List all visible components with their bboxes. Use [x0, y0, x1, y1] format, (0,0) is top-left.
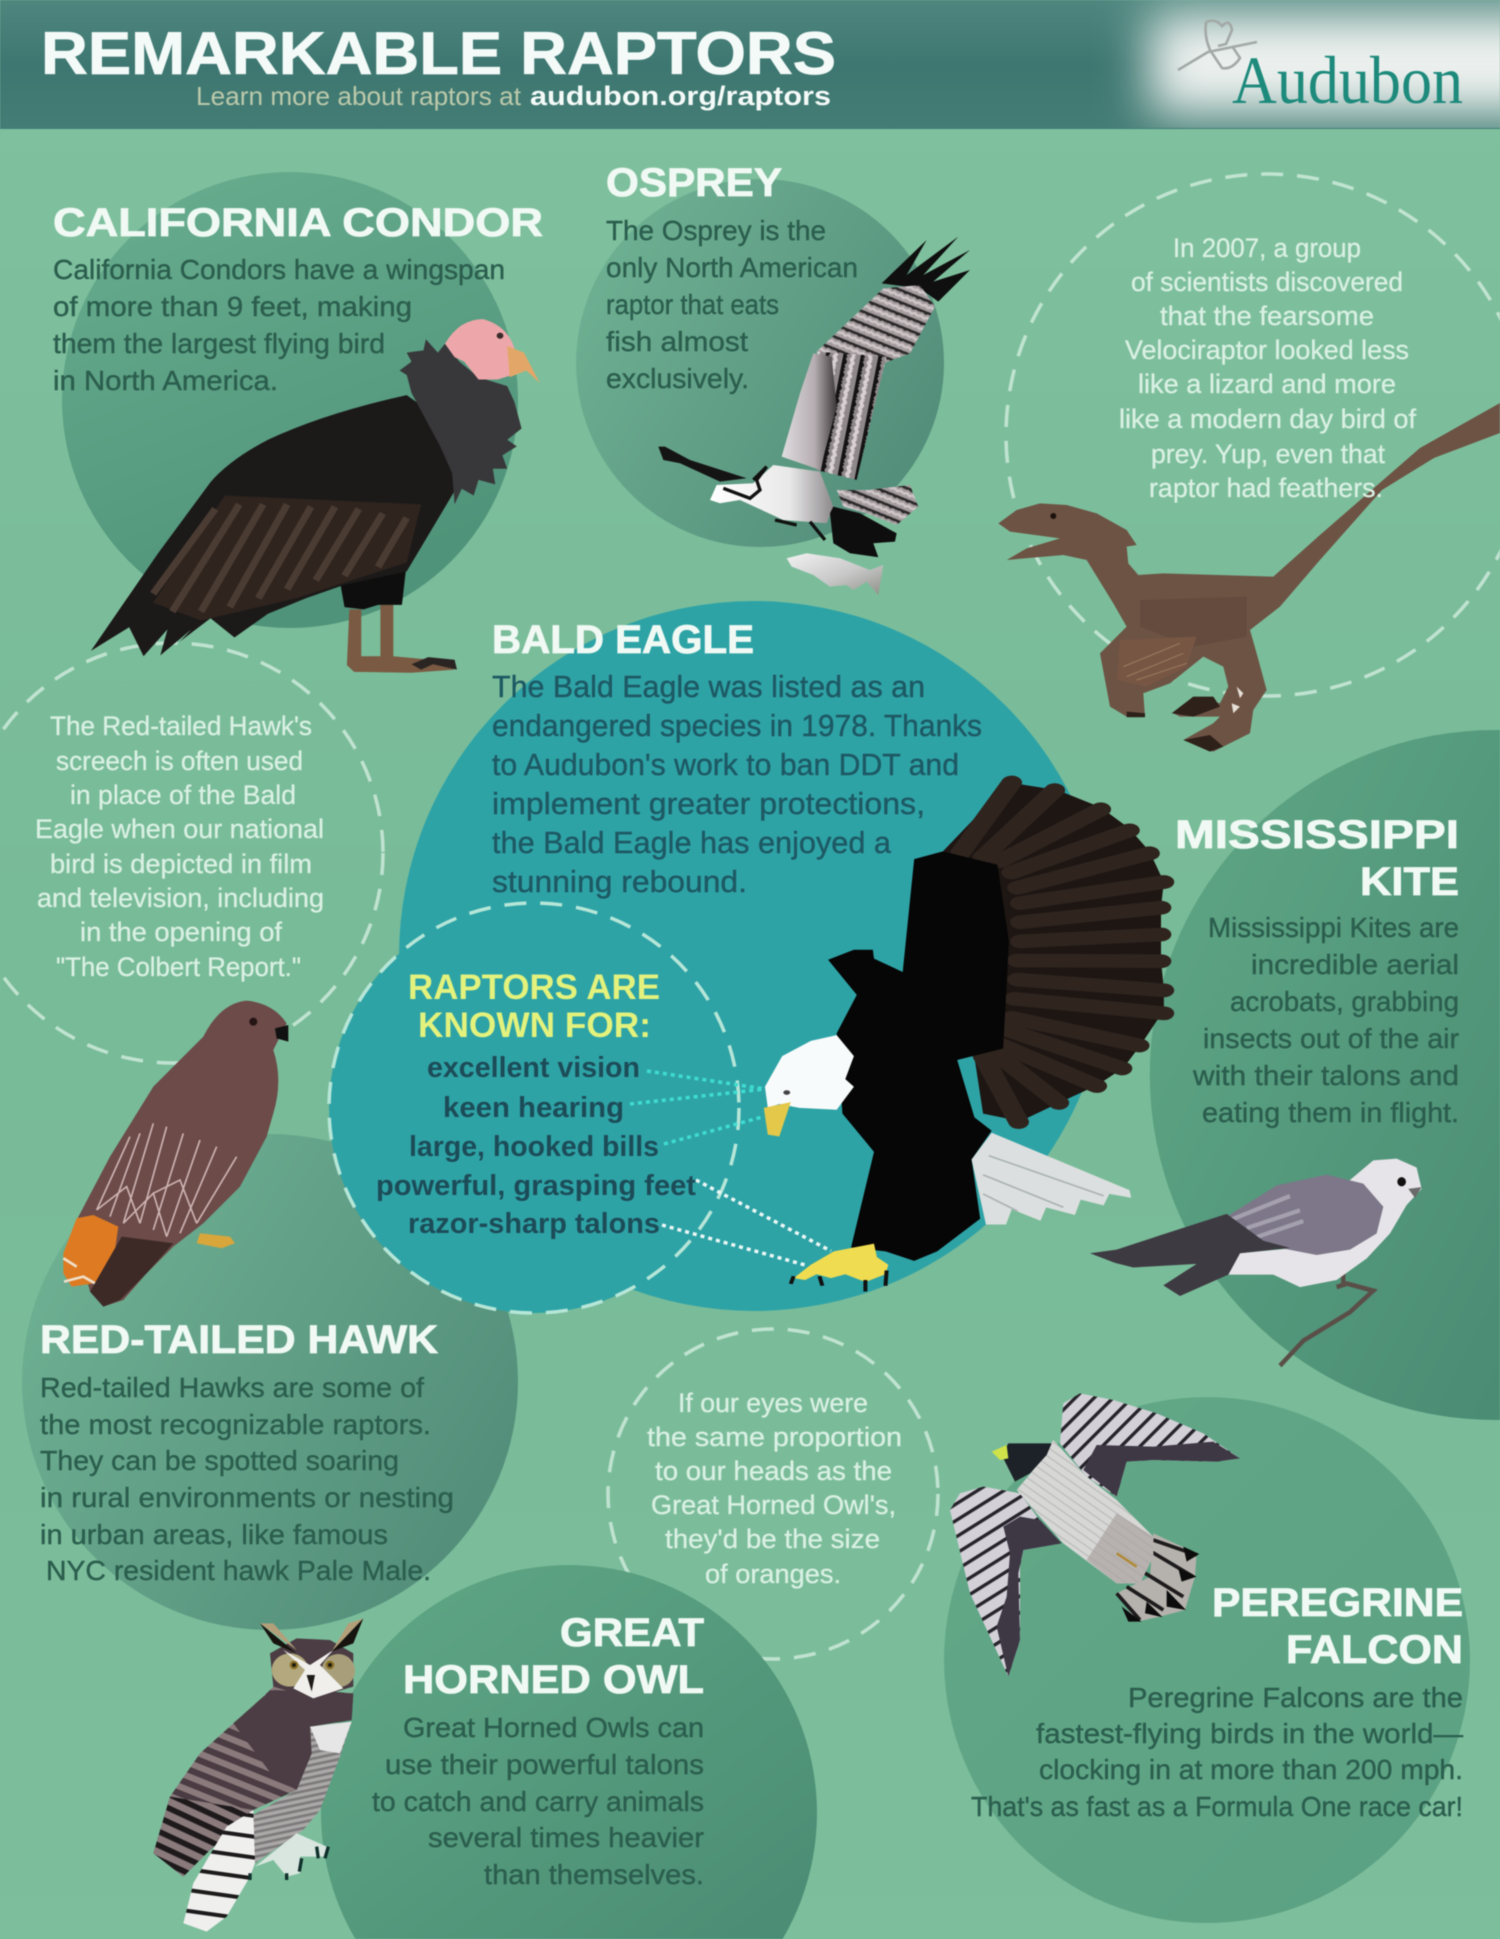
text: velociraptor fact: of scientists discovered — [1131, 267, 1403, 297]
bird: Mississippi Kite — [1090, 1159, 1422, 1366]
bird: Peregrine Falcon — [950, 1393, 1240, 1677]
circle: Great Horned Owl — [321, 1565, 817, 1939]
circle: Osprey — [576, 179, 944, 547]
text: Bald Eagle — [492, 618, 982, 899]
list: powerful, grasping feet — [376, 1170, 696, 1202]
text: hawk fact: screech is often used — [56, 746, 303, 776]
body — [53, 254, 505, 396]
text: hawk fact: The Red-tailed Hawk's — [50, 711, 312, 741]
text: hawk fact: in place of the Bald — [70, 780, 296, 810]
subtitle link: Learn more about raptors at — [196, 81, 522, 111]
body: acrobats, grabbing — [1230, 986, 1459, 1017]
heading — [408, 968, 660, 1045]
text: owl eyes fact: Great Horned Owl's, — [651, 1490, 896, 1520]
body — [606, 215, 858, 394]
heading: MISSISSIPPI — [1175, 813, 1459, 857]
list: keen hearing — [443, 1092, 624, 1124]
body — [372, 1712, 704, 1890]
bird: Red-tailed Hawk — [63, 1001, 288, 1307]
list: large, hooked bills — [409, 1131, 659, 1163]
text: raptors are known for — [376, 968, 696, 1240]
body: the most recognizable raptors. — [40, 1409, 431, 1440]
text: velociraptor fact: prey. Yup, even that — [1151, 439, 1385, 469]
text: velociraptor fact: raptor had feathers. — [1149, 473, 1383, 503]
circle: Mississippi Kite — [1150, 730, 1500, 1420]
text: velociraptor fact: In 2007, a group — [1173, 233, 1361, 263]
text: owl eyes fact: to our heads as the — [655, 1456, 892, 1486]
text: velociraptor fact: that the fearsome — [1160, 301, 1374, 331]
text: velociraptor fact: like a lizard and more — [1138, 369, 1396, 399]
heading — [1175, 813, 1459, 904]
text: hawk fact: Eagle when our national — [35, 814, 324, 844]
text: Osprey — [606, 161, 858, 394]
text: hawk fact: in the opening of — [80, 917, 282, 947]
body: in North America. — [53, 365, 278, 396]
body: several times heavier — [428, 1822, 704, 1853]
heading — [1212, 1581, 1463, 1672]
body: only North American — [606, 252, 858, 283]
heading: OSPREY — [606, 161, 782, 205]
body: use their powerful talons — [385, 1749, 704, 1780]
list: razor-sharp talons — [408, 1208, 660, 1240]
circle: Peregrine Falcon — [944, 1397, 1470, 1923]
body: That's as fast as a Formula One race car! — [971, 1791, 1463, 1822]
pointer lines: eagle head — [630, 1071, 765, 1144]
panel: raptors are known for — [329, 903, 739, 1313]
dashed circle: hawk fact — [0, 643, 383, 1063]
body: fastest-flying birds in the world— — [1036, 1718, 1463, 1749]
body: stunning rebound. — [492, 864, 747, 899]
text: hawk fact — [35, 711, 324, 982]
heading: RED-TAILED HAWK — [40, 1318, 438, 1362]
text: velociraptor fact: like a modern day bird of — [1119, 404, 1416, 434]
heading: RAPTORS ARE — [408, 968, 660, 1007]
body: incredible aerial — [1251, 949, 1459, 980]
heading — [403, 1611, 704, 1702]
heading: KITE — [1360, 860, 1459, 904]
text: velociraptor fact: Velociraptor looked less — [1125, 335, 1409, 365]
body: Peregrine Falcons are the — [1128, 1682, 1463, 1713]
logo bird — [1178, 21, 1257, 70]
text: hawk fact: and television, including — [37, 883, 324, 913]
bird: Great Horned Owl — [153, 1618, 363, 1932]
body: California Condors have a wingspan — [53, 254, 505, 285]
subtitle link — [196, 81, 831, 111]
body: of more than 9 feet, making — [53, 291, 412, 322]
title: REMARKABLE RAPTORS — [41, 20, 836, 87]
body: They can be spotted soaring — [40, 1445, 399, 1476]
logo wordmark: Audubon — [1232, 42, 1463, 118]
text: Great Horned Owl — [372, 1611, 704, 1890]
panel: Bald Eagle teal circle — [399, 601, 1109, 1311]
body: exclusively. — [606, 363, 749, 394]
text: hawk fact: bird is depicted in film — [50, 849, 312, 879]
text: velociraptor fact — [1119, 233, 1416, 503]
heading: PEREGRINE — [1212, 1581, 1463, 1625]
Audubon logo — [1178, 21, 1463, 118]
body: NYC resident hawk Pale Male. — [46, 1555, 431, 1586]
body: Red-tailed Hawks are some of — [40, 1372, 424, 1403]
body: to catch and carry animals — [372, 1786, 704, 1817]
dashed circle: owl eyes fact — [608, 1329, 938, 1659]
text: owl eyes fact — [647, 1388, 902, 1589]
body — [492, 669, 982, 899]
logo glow — [1150, 14, 1500, 114]
body: endangered species in 1978. Thanks — [492, 708, 982, 743]
body — [40, 1372, 454, 1586]
body: Mississippi Kites are — [1208, 912, 1459, 943]
body: clocking in at more than 200 mph. — [1039, 1754, 1463, 1785]
text: owl eyes fact: they'd be the size — [665, 1524, 880, 1554]
bird: Bald Eagle — [764, 783, 1164, 1292]
body: implement greater protections, — [492, 786, 925, 821]
body: raptor that eats — [606, 289, 779, 320]
heading: HORNED OWL — [403, 1658, 704, 1702]
list — [376, 1052, 696, 1240]
body — [971, 1682, 1463, 1822]
body: them the largest flying bird — [53, 328, 385, 359]
heading: CALIFORNIA CONDOR — [53, 201, 543, 245]
heading: FALCON — [1286, 1628, 1463, 1672]
heading: BALD EAGLE — [492, 618, 754, 662]
body: in urban areas, like famous — [40, 1519, 388, 1550]
text: owl eyes fact: If our eyes were — [678, 1388, 868, 1418]
text: hawk fact: "The Colbert Report." — [56, 952, 301, 982]
list: excellent vision — [427, 1052, 640, 1084]
body: than themselves. — [484, 1859, 704, 1890]
body: to Audubon's work to ban DDT and — [492, 747, 959, 782]
body: with their talons and — [1192, 1060, 1459, 1091]
circle: Red-tailed Hawk — [22, 1134, 518, 1630]
body: eating them in flight. — [1202, 1097, 1459, 1128]
body: The Bald Eagle was listed as an — [492, 669, 925, 704]
text: Peregrine Falcon — [971, 1581, 1463, 1822]
text: owl eyes fact: the same proportion — [647, 1422, 902, 1452]
heading: KNOWN FOR: — [418, 1006, 651, 1045]
dashed circle: velociraptor fact — [1006, 174, 1500, 696]
header banner — [0, 0, 1500, 129]
bird: California Condor — [91, 319, 540, 673]
body: fish almost — [606, 326, 748, 357]
text: California Condor — [53, 201, 543, 396]
bird: Velociraptor — [998, 403, 1500, 752]
body: in rural environments or nesting — [40, 1482, 454, 1513]
circle: California Condor — [62, 172, 518, 628]
subtitle link: audubon.org/raptors — [530, 81, 831, 111]
body: Great Horned Owls can — [403, 1712, 704, 1743]
bird: Osprey — [658, 237, 970, 595]
text: owl eyes fact: of oranges. — [705, 1559, 841, 1589]
heading: GREAT — [560, 1611, 704, 1655]
pointer lines: eagle feet — [662, 1180, 831, 1265]
text: Red-tailed Hawk — [40, 1318, 454, 1586]
text: Mississippi Kite — [1175, 813, 1459, 1128]
body — [1192, 912, 1459, 1128]
body: the Bald Eagle has enjoyed a — [492, 825, 892, 860]
body: insects out of the air — [1203, 1023, 1459, 1054]
body: The Osprey is the — [606, 215, 826, 246]
